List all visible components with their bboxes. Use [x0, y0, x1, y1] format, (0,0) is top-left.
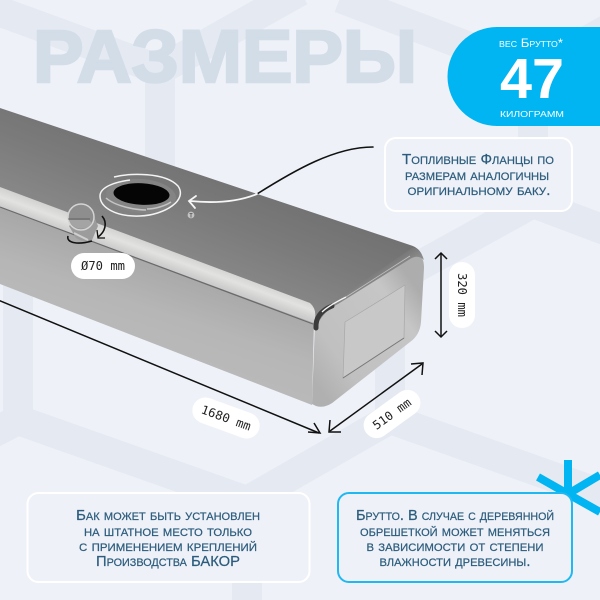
fuel flange	[100, 174, 194, 218]
length label: 1680 mm	[199, 403, 253, 433]
height label	[449, 262, 475, 328]
fuel callout: размерам аналогичны	[405, 167, 549, 184]
title: РАЗМЕРЫ	[33, 15, 417, 98]
flange hole	[113, 182, 170, 206]
asterisk	[538, 460, 600, 512]
badge unit: килограмм	[500, 106, 564, 120]
gross weight note: влажности древесины.	[380, 553, 530, 570]
callout arrow	[189, 147, 373, 208]
badge number: 47	[500, 47, 564, 111]
tank side face	[0, 204, 314, 405]
tank top face	[0, 108, 422, 322]
gross weight note: в зависимости от степени	[366, 538, 544, 555]
fuel callout: Топливные Фланцы по	[402, 151, 554, 168]
weight badge	[448, 27, 600, 126]
mounting note: с применением креплений	[79, 538, 257, 555]
flange plate	[105, 177, 177, 215]
fuel callout	[385, 138, 572, 211]
mounting note: на штатное место только	[84, 523, 252, 540]
gross weight note	[338, 493, 572, 582]
gross weight note: Брутто. В случае с деревянной	[356, 507, 554, 524]
width arrow	[329, 363, 423, 432]
width label	[358, 385, 426, 443]
height arrow	[435, 253, 447, 337]
rotation arrow	[68, 216, 105, 243]
width label: 510 mm	[370, 395, 414, 433]
tank edge highlight	[0, 187, 315, 323]
badge caption: вес Брутто*	[499, 36, 563, 50]
flange white outline	[100, 174, 180, 216]
height label: 320 mm	[455, 273, 469, 317]
fuel callout: оригинальному баку.	[408, 182, 550, 199]
tank corner gloss	[316, 306, 332, 328]
bolt	[188, 212, 194, 218]
mounting note: Бак может быть установлен	[76, 507, 260, 524]
diameter label: Ø70 mm	[81, 259, 125, 273]
gross weight note: обрешеткой может меняться	[360, 523, 550, 540]
tank end bevel	[320, 248, 424, 320]
length arrow	[0, 300, 320, 433]
diameter label	[71, 253, 135, 279]
mounting note: Производства БАКОР	[96, 553, 240, 570]
diameter cap	[68, 204, 105, 243]
mounting note	[28, 493, 310, 582]
tank end plate	[343, 285, 405, 378]
tank end face	[312, 255, 424, 407]
tank	[0, 108, 424, 407]
cap body	[69, 207, 98, 241]
length label	[189, 394, 263, 442]
